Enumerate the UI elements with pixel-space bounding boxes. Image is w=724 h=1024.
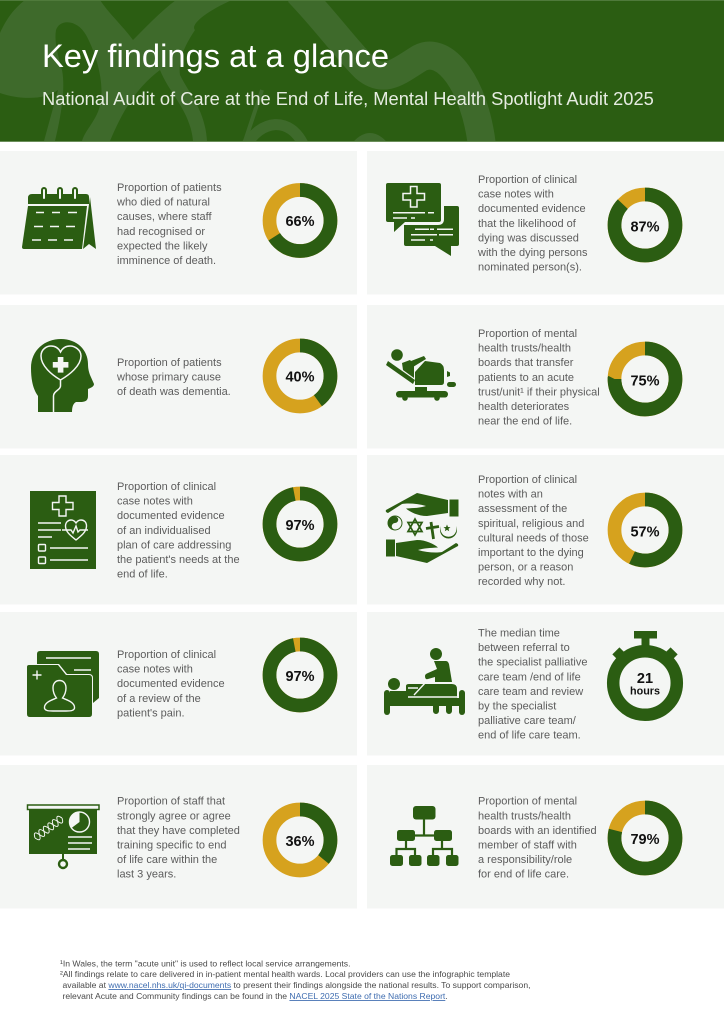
text: patients to an acute [478, 372, 574, 384]
text: patient's pain. [117, 707, 185, 719]
text: boards that transfer [478, 357, 574, 369]
text: of an individualised [117, 525, 211, 537]
panel: transfer to acute trust [367, 305, 724, 448]
icon: medical document [30, 491, 96, 569]
text: causes, where staff [117, 211, 213, 223]
donut: 97% [270, 644, 330, 706]
donut: 57%: 57% [630, 524, 660, 540]
donut: 40%: 40% [285, 370, 315, 386]
text: health trusts/health [478, 343, 571, 355]
text: between referral to [478, 642, 570, 654]
text: training specific to end [117, 840, 226, 852]
donut: 79% [614, 808, 676, 868]
donut: 57% [614, 500, 676, 560]
text: palliative care team/ [478, 715, 577, 727]
text: Proportion of staff that [117, 796, 225, 808]
text: nominated person(s). [478, 262, 582, 274]
text: Proportion of mental [478, 796, 577, 808]
panel: spiritual assessment [367, 455, 724, 604]
text: Proportion of clinical [478, 474, 577, 486]
text: Proportion of clinical [117, 649, 216, 661]
footnotes: relevant Acute and Community findings can be found in the [62, 991, 289, 1001]
donut: 75%: 75% [630, 373, 660, 389]
icon: reclined patient on trolley [386, 349, 456, 401]
text: care team /end of life [478, 671, 581, 683]
donut: 36%: 36% [285, 834, 315, 850]
footnotes: www.nacel.nhs.uk/qi-documents to present their findings alongside the national results. To support comparison, [108, 980, 531, 990]
text: of life care within the [117, 854, 217, 866]
donut: 66%: 66% [285, 214, 315, 230]
donut: 79%: 79% [630, 832, 660, 848]
text: the patient's needs at the [117, 554, 240, 566]
panel: staff training [0, 765, 357, 908]
panel: natural causes recognised [0, 151, 357, 294]
text: assessment of the [478, 503, 567, 515]
icon: presentation board [28, 805, 99, 868]
text: case notes with [117, 664, 193, 676]
stopwatch: 21 hours: 21 [637, 671, 653, 687]
footnotes: available at [62, 980, 108, 990]
text: imminence of death. [117, 255, 216, 267]
text: cultural needs of those [478, 532, 589, 544]
panel: median time to review [367, 612, 724, 756]
text: care team and review [478, 686, 583, 698]
title: Key findings at a glance [42, 37, 389, 74]
text: Proportion of patients [117, 357, 222, 369]
icon: hands with faith symbols [386, 493, 458, 563]
panel: primary cause dementia [0, 305, 357, 448]
stopwatch: 21 hours: hours [630, 686, 660, 698]
text: by the specialist [478, 700, 556, 712]
donut: 36% [270, 810, 330, 870]
donut: 75% [614, 348, 676, 410]
donut: 87% [614, 194, 676, 256]
text: the specialist palliative [478, 657, 587, 669]
donut: 40% [270, 346, 330, 406]
icon: organisation chart [390, 806, 458, 866]
text: Proportion of mental [478, 328, 577, 340]
text: case notes with [478, 189, 554, 201]
icon: speech bubbles [386, 183, 459, 256]
text: expected the likely [117, 240, 208, 252]
stopwatch: 21 hours [612, 631, 678, 715]
text: trust/unit¹ if their physical [478, 386, 600, 398]
text: documented evidence [117, 678, 225, 690]
text: had recognised or [117, 226, 205, 238]
text: Proportion of patients [117, 182, 222, 194]
text: with the dying persons [477, 247, 588, 259]
text: whose primary cause [116, 372, 221, 384]
text: documented evidence [117, 510, 225, 522]
text: notes with an [478, 489, 543, 501]
header banner [0, 0, 724, 146]
text: spiritual, religious and [478, 518, 584, 530]
text: Proportion of clinical [478, 174, 577, 186]
text: end of life care team. [478, 730, 581, 742]
text: for end of life care. [478, 869, 569, 881]
text: who died of natural [116, 197, 210, 209]
text: Proportion of clinical [117, 481, 216, 493]
text: health deteriorates [478, 401, 570, 413]
text: person, or a reason [478, 562, 573, 574]
icon: patient folder [27, 651, 99, 717]
icon: calendar [22, 188, 96, 249]
panel: likelihood of dying discussed [367, 151, 724, 294]
icon: head with heart [31, 339, 94, 412]
footnotes: ¹In Wales, the term "acute unit" is used to reflect local service arrangements. [60, 958, 350, 968]
donut: 87%: 87% [630, 220, 660, 236]
subtitle: National Audit of Care at the End of Life, Mental Health Spotlight Audit 2025 [42, 88, 654, 109]
panel: review of pain [0, 612, 357, 756]
donut: 97%: 97% [285, 518, 315, 534]
text: member of staff with [478, 840, 577, 852]
text: that they have completed [117, 825, 240, 837]
text: dying was discussed [478, 232, 579, 244]
text: near the end of life. [478, 416, 572, 428]
text: strongly agree or agree [117, 810, 231, 822]
text: health trusts/health [478, 810, 571, 822]
footnotes: ²All findings relate to care delivered in in-patient mental health wards. Local providers can use the infographic template [60, 969, 510, 979]
donut: 66% [270, 190, 330, 251]
text: of a review of the [117, 693, 201, 705]
text: The median time [478, 628, 560, 640]
panel: identified member of staff [367, 765, 724, 908]
text: recorded why not. [478, 576, 565, 588]
text: a responsibility/role [478, 854, 572, 866]
text: last 3 years. [117, 869, 176, 881]
text: of death was dementia. [117, 386, 231, 398]
footnotes: NACEL 2025 State of the Nations Report. [289, 991, 448, 1001]
text: boards with an identified [478, 825, 597, 837]
text: important to the dying [478, 547, 584, 559]
text: documented evidence [478, 203, 586, 215]
donut: 97% [270, 494, 330, 554]
panel: individualised plan of care [0, 455, 357, 604]
text: end of life. [117, 569, 168, 581]
donut: 97%: 97% [285, 669, 315, 685]
text: plan of care addressing [117, 539, 231, 551]
text: case notes with [117, 496, 193, 508]
text: that the likelihood of [478, 218, 577, 230]
icon: carer with patient in bed [384, 648, 465, 715]
